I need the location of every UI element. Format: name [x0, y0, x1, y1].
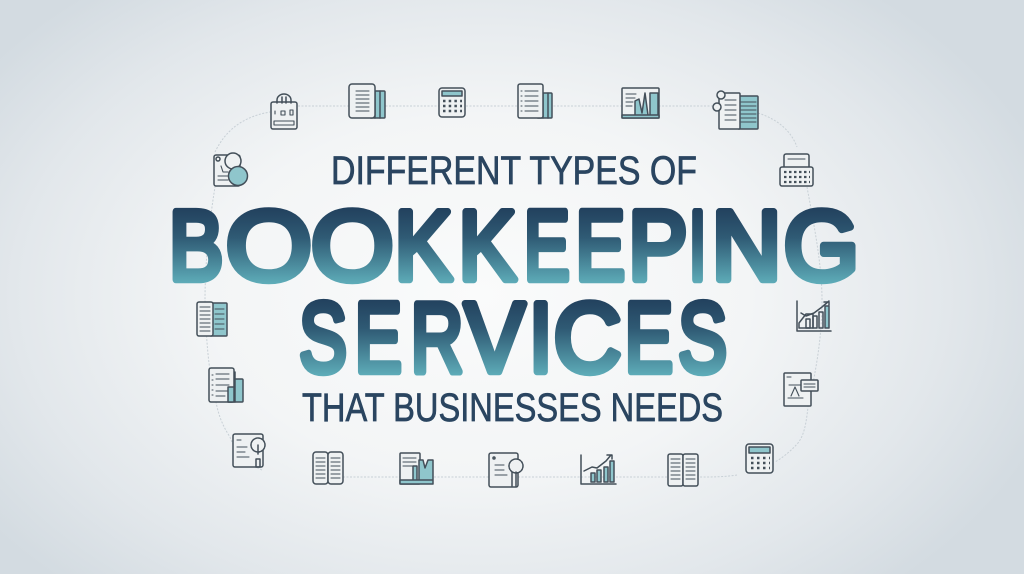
- heading: services: E: [625, 282, 673, 392]
- icon: document with gear: [489, 453, 523, 487]
- heading: bookkeeping: G: [784, 190, 859, 300]
- heading: services: E: [355, 282, 402, 392]
- heading: bookkeeping: E: [524, 190, 570, 300]
- icon: growth bar chart: [581, 455, 616, 484]
- heading: services: S: [299, 282, 347, 392]
- heading: bookkeeping: N: [712, 190, 781, 300]
- heading: bookkeeping: K: [459, 190, 516, 300]
- heading: bookkeeping: I: [689, 190, 706, 300]
- icon: ledger book: [197, 302, 227, 336]
- icon: document with chart: [400, 453, 433, 484]
- heading: services: C: [554, 282, 621, 392]
- icon: document with chart: [622, 88, 659, 118]
- heading line: that businesses needs: THAT BUSINESSES NEEDS: [302, 386, 723, 430]
- heading: services: I: [529, 282, 552, 392]
- heading: services: S: [678, 282, 727, 392]
- icon: calculator: [439, 88, 465, 117]
- heading line: different types of: DIFFERENT TYPES OF: [331, 149, 697, 193]
- heading: services: V: [465, 282, 525, 392]
- icon: growth bar chart: [797, 301, 831, 331]
- heading: bookkeeping: O: [226, 190, 312, 300]
- icon: document stack: [209, 368, 243, 402]
- icon: open book: [313, 452, 343, 484]
- icon: document with gear: [233, 434, 265, 467]
- icon: locked ledger: [271, 94, 297, 129]
- icon: open book: [668, 454, 698, 486]
- heading: bookkeeping: K: [395, 190, 452, 300]
- icon: document stack: [518, 84, 552, 118]
- heading: bookkeeping: P: [628, 190, 687, 300]
- icon: adding machine: [780, 154, 813, 186]
- heading: bookkeeping: B: [169, 190, 223, 300]
- icon: document with magnifier: [214, 153, 248, 186]
- icon: document stack: [349, 84, 385, 118]
- heading: services: R: [411, 282, 463, 392]
- icon: document with speech bubble: [784, 373, 818, 406]
- heading: bookkeeping: E: [576, 190, 625, 300]
- dashed connector path: [205, 106, 822, 477]
- icon: document with teal ledger: [713, 91, 758, 129]
- heading: bookkeeping: O: [311, 190, 394, 300]
- icon: calculator: [746, 444, 773, 473]
